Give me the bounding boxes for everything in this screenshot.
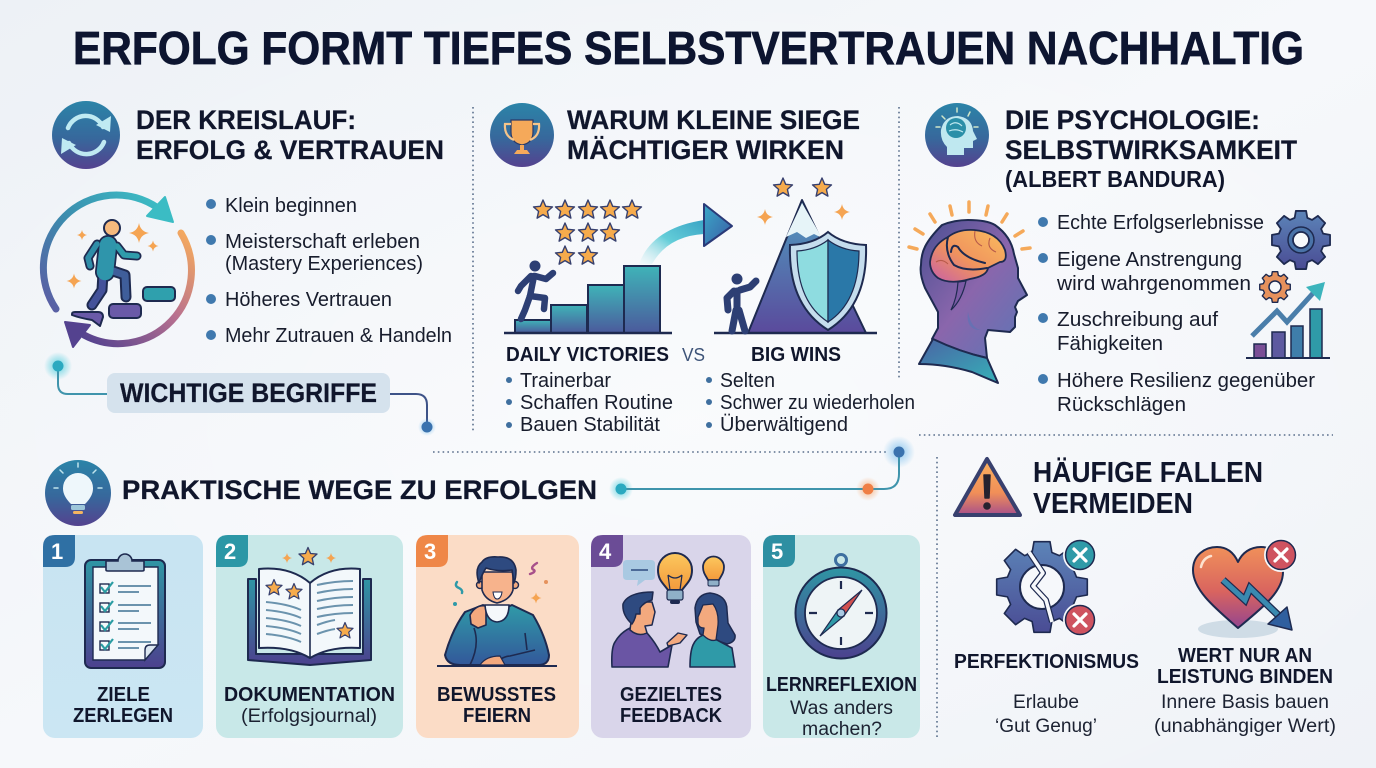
badge 1: 1 bbox=[51, 539, 63, 564]
heading: VERMEIDEN bbox=[1033, 488, 1193, 520]
bullet list: cycle steps: Höheres Vertrauen bbox=[225, 289, 392, 311]
list: daily victories: Bauen Stabilität bbox=[520, 414, 660, 436]
text: wert nur an leistung binden: LEISTUNG BINDEN bbox=[1157, 666, 1333, 688]
card label: machen? bbox=[802, 719, 882, 740]
badge 4 bbox=[591, 535, 623, 567]
card label bbox=[437, 684, 556, 727]
text: wert nur an leistung binden: WERT NUR AN bbox=[1178, 645, 1312, 667]
comparison labels bbox=[506, 344, 841, 366]
card 1: ziele zerlegen bbox=[43, 535, 203, 738]
connector: left bbox=[44, 352, 107, 394]
card label: ZERLEGEN bbox=[73, 705, 173, 727]
card label: BEWUSSTES bbox=[437, 684, 556, 706]
bullet list: self-efficacy: Fähigkeiten bbox=[1057, 333, 1163, 355]
icon: open book bbox=[248, 548, 371, 665]
icon: trophy bbox=[490, 103, 554, 167]
icon: light bulb bbox=[45, 460, 111, 526]
chart: rising bars with arrow bbox=[1246, 282, 1330, 358]
badge 5: 5 bbox=[771, 539, 783, 564]
list: daily victories bbox=[506, 370, 673, 436]
icon: two people talking with bulbs bbox=[612, 553, 735, 667]
card label bbox=[73, 684, 173, 727]
heading: (ALBERT BANDURA) bbox=[1005, 166, 1225, 192]
icon: compass bbox=[796, 554, 886, 658]
list: big wins: Schwer zu wiederholen bbox=[720, 392, 915, 414]
card 2: dokumentation bbox=[216, 535, 403, 738]
heading: DER KREISLAUF: bbox=[136, 105, 356, 135]
card label: (Erfolgsjournal) bbox=[241, 706, 377, 727]
heading: PRAKTISCHE WEGE ZU ERFOLGEN bbox=[122, 475, 597, 505]
text: perfektionismus bbox=[954, 651, 1139, 737]
card label: DOKUMENTATION bbox=[224, 684, 395, 706]
heading bbox=[136, 105, 444, 165]
illustration: daily victories staircase bbox=[504, 200, 672, 333]
key terms label bbox=[107, 373, 390, 413]
card label bbox=[224, 684, 395, 727]
cycle diagram with climbing figure bbox=[43, 195, 191, 347]
title: ERFOLG FORMT TIEFES SELBSTVERTRAUEN NACHHALTIG bbox=[73, 22, 1304, 74]
illustration: head with brain bbox=[909, 202, 1030, 383]
panel: häufige fallen bbox=[954, 456, 1336, 737]
badge 5 bbox=[763, 535, 795, 567]
bullet list: self-efficacy: Rückschlägen bbox=[1057, 394, 1186, 416]
heading bbox=[567, 105, 860, 165]
card label: LERNREFLEXION bbox=[766, 674, 917, 696]
heading: SELBSTWIRKSAMKEIT bbox=[1005, 135, 1297, 165]
card 3: bewusstes feiern bbox=[416, 535, 579, 738]
badge 2: 2 bbox=[224, 539, 236, 564]
card label bbox=[766, 674, 917, 740]
card label: FEEDBACK bbox=[620, 705, 723, 727]
bullet list: cycle steps bbox=[206, 195, 452, 347]
card label: GEZIELTES bbox=[620, 684, 722, 706]
bullet list: self-efficacy: Eigene Anstrengung bbox=[1057, 249, 1242, 271]
icon: warning triangle bbox=[955, 459, 1020, 515]
card label bbox=[620, 684, 723, 727]
bullet list: self-efficacy: wird wahrgenommen bbox=[1056, 273, 1251, 295]
illustration: big wins mountain and shield bbox=[714, 178, 877, 333]
icon: person with coffee bbox=[437, 557, 557, 666]
list: big wins bbox=[706, 370, 915, 436]
panel: der kreislauf bbox=[43, 101, 452, 436]
heading: ERFOLG & VERTRAUEN bbox=[136, 135, 444, 165]
panel: die psychologie bbox=[909, 103, 1330, 416]
badge 3: 3 bbox=[424, 539, 436, 564]
card label: ZIELE bbox=[97, 684, 150, 706]
card 5: lernreflexion bbox=[763, 535, 920, 740]
bullet list: self-efficacy: Zuschreibung auf bbox=[1057, 309, 1218, 331]
list: daily victories: Schaffen Routine bbox=[520, 392, 673, 414]
list: big wins: Überwältigend bbox=[720, 414, 848, 436]
heading: HÄUFIGE FALLEN bbox=[1033, 456, 1263, 489]
list: big wins: Selten bbox=[720, 370, 775, 392]
text: perfektionismus: ‘Gut Genug’ bbox=[995, 716, 1097, 737]
bullet list: cycle steps: Meisterschaft erleben bbox=[225, 231, 420, 253]
icon: broken gear bbox=[997, 538, 1097, 637]
text: wert nur an leistung binden: Innere Basis bauen bbox=[1161, 692, 1329, 713]
comparison labels: DAILY VICTORIES bbox=[506, 344, 669, 366]
icon: clipboard bbox=[85, 554, 165, 668]
text: wert nur an leistung binden bbox=[1154, 645, 1336, 737]
panel: kleine siege bbox=[490, 103, 915, 436]
text: wert nur an leistung binden: (unabhängiger Wert) bbox=[1154, 716, 1336, 737]
comparison labels: VS bbox=[682, 345, 705, 365]
badge 2 bbox=[216, 535, 248, 567]
bullet list: self-efficacy bbox=[1038, 212, 1315, 416]
key terms label: WICHTIGE BEGRIFFE bbox=[120, 378, 377, 408]
connector: right bbox=[390, 394, 436, 436]
badge 1 bbox=[43, 535, 75, 567]
badge 4: 4 bbox=[599, 539, 612, 564]
heading bbox=[1033, 456, 1263, 520]
card 4: gezieltes feedback bbox=[591, 535, 751, 738]
icon: cycle arrows bbox=[52, 101, 120, 169]
heading: MÄCHTIGER WIRKEN bbox=[567, 135, 844, 165]
connector: to traps panel bbox=[609, 436, 915, 501]
badge 3 bbox=[416, 535, 448, 567]
panel: praktische wege bbox=[43, 436, 920, 740]
comparison labels: BIG WINS bbox=[751, 344, 841, 366]
arrow: small wins to big wins bbox=[639, 204, 732, 264]
heading: DIE PSYCHOLOGIE: bbox=[1005, 105, 1260, 135]
icon: gears bbox=[1260, 211, 1330, 302]
heading bbox=[1005, 105, 1297, 192]
bullet list: cycle steps: Klein beginnen bbox=[225, 195, 357, 217]
bullet list: self-efficacy: Höhere Resilienz gegenüber bbox=[1057, 370, 1315, 392]
icon: head with brain bbox=[925, 103, 989, 167]
list: daily victories: Trainerbar bbox=[520, 370, 611, 392]
bullet list: cycle steps: (Mastery Experiences) bbox=[225, 253, 423, 275]
bullet list: cycle steps: Mehr Zutrauen & Handeln bbox=[225, 325, 452, 347]
card label: FEIERN bbox=[463, 705, 531, 727]
bullet list: self-efficacy: Echte Erfolgserlebnisse bbox=[1057, 212, 1264, 234]
text: perfektionismus: Erlaube bbox=[1013, 692, 1079, 713]
text: perfektionismus: PERFEKTIONISMUS bbox=[954, 651, 1139, 673]
card label: Was anders bbox=[790, 698, 893, 719]
heading: WARUM KLEINE SIEGE bbox=[567, 105, 860, 135]
icon: heart with falling arrow bbox=[1193, 538, 1298, 638]
